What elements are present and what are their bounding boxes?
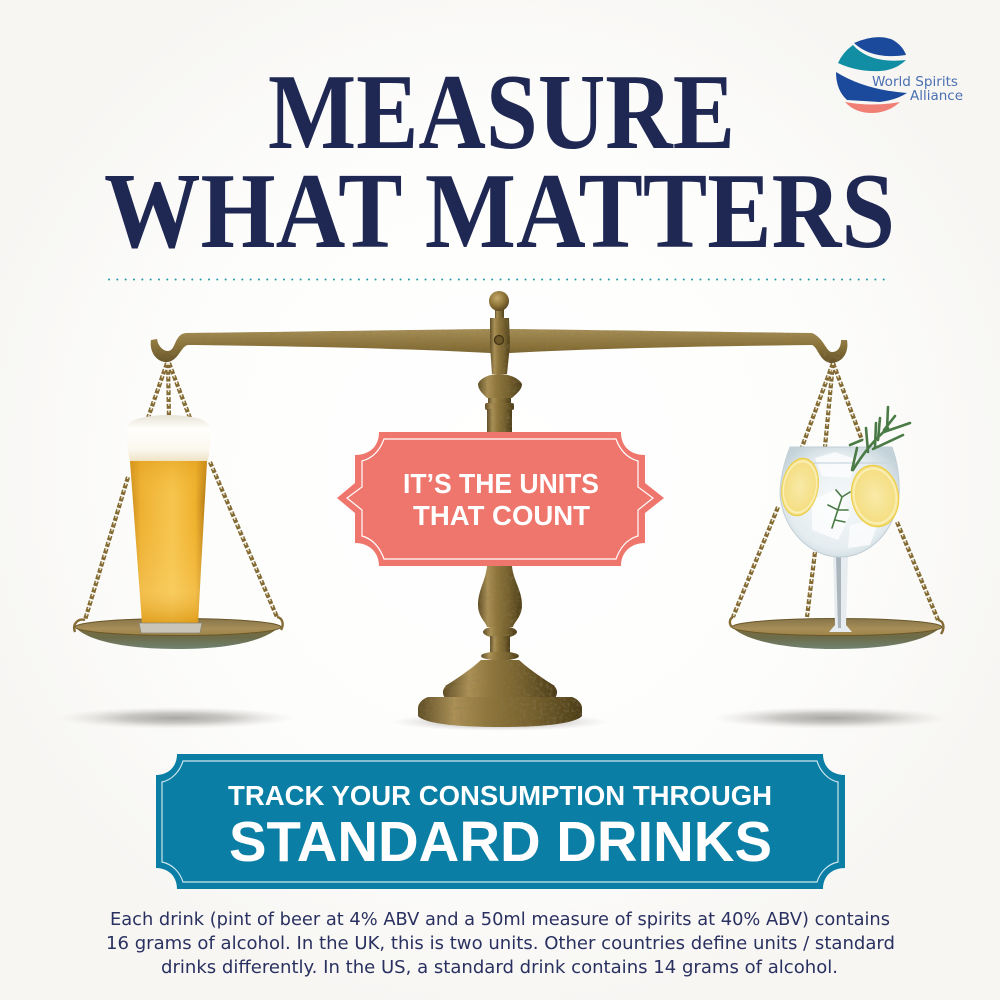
body text: 16 grams of alcohol. In the UK, this is two units. Other countries define units / standard (106, 933, 895, 954)
logo: World Spirits Alliance: Alliance (910, 88, 963, 104)
logo: World Spirits Alliance: World Spirits (872, 74, 958, 90)
logo: World Spirits Alliance (836, 37, 963, 113)
rosemary (828, 407, 910, 528)
lemon slices (777, 455, 904, 531)
body text: drinks differently. In the US, a standard drink contains 14 grams of alcohol. (161, 957, 838, 978)
left chains (85, 363, 277, 620)
pivot pin (494, 336, 504, 344)
banner: track your consumption: STANDARD DRINKS (229, 810, 772, 874)
balance scale (74, 291, 943, 727)
left pan (74, 617, 283, 649)
title: MEASURE (268, 53, 735, 172)
finial ball (489, 291, 509, 311)
icon: beer glass (127, 415, 210, 633)
right pan (730, 617, 943, 649)
banner: it's the units that count: IT’S THE UNITS (403, 468, 599, 499)
right chains (733, 363, 938, 620)
body text (106, 909, 895, 978)
ice cubes (812, 452, 880, 548)
dotted divider (109, 278, 888, 280)
banner: track your consumption: TRACK YOUR CONSUMPTION THROUGH (228, 780, 772, 811)
title: WHAT MATTERS (104, 152, 895, 271)
body text: Each drink (pint of beer at 4% ABV and a 50ml measure of spirits at 40% ABV) contains (110, 909, 890, 930)
beam and hooks (151, 329, 847, 363)
banner: it's the units that count (337, 432, 664, 566)
icon: gin glass with lemon and rosemary (777, 407, 910, 632)
banner: track your consumption (156, 754, 845, 889)
central column (418, 309, 582, 727)
banner: it's the units that count: THAT COUNT (413, 500, 590, 531)
floor shadows (58, 707, 948, 731)
title (104, 53, 895, 271)
